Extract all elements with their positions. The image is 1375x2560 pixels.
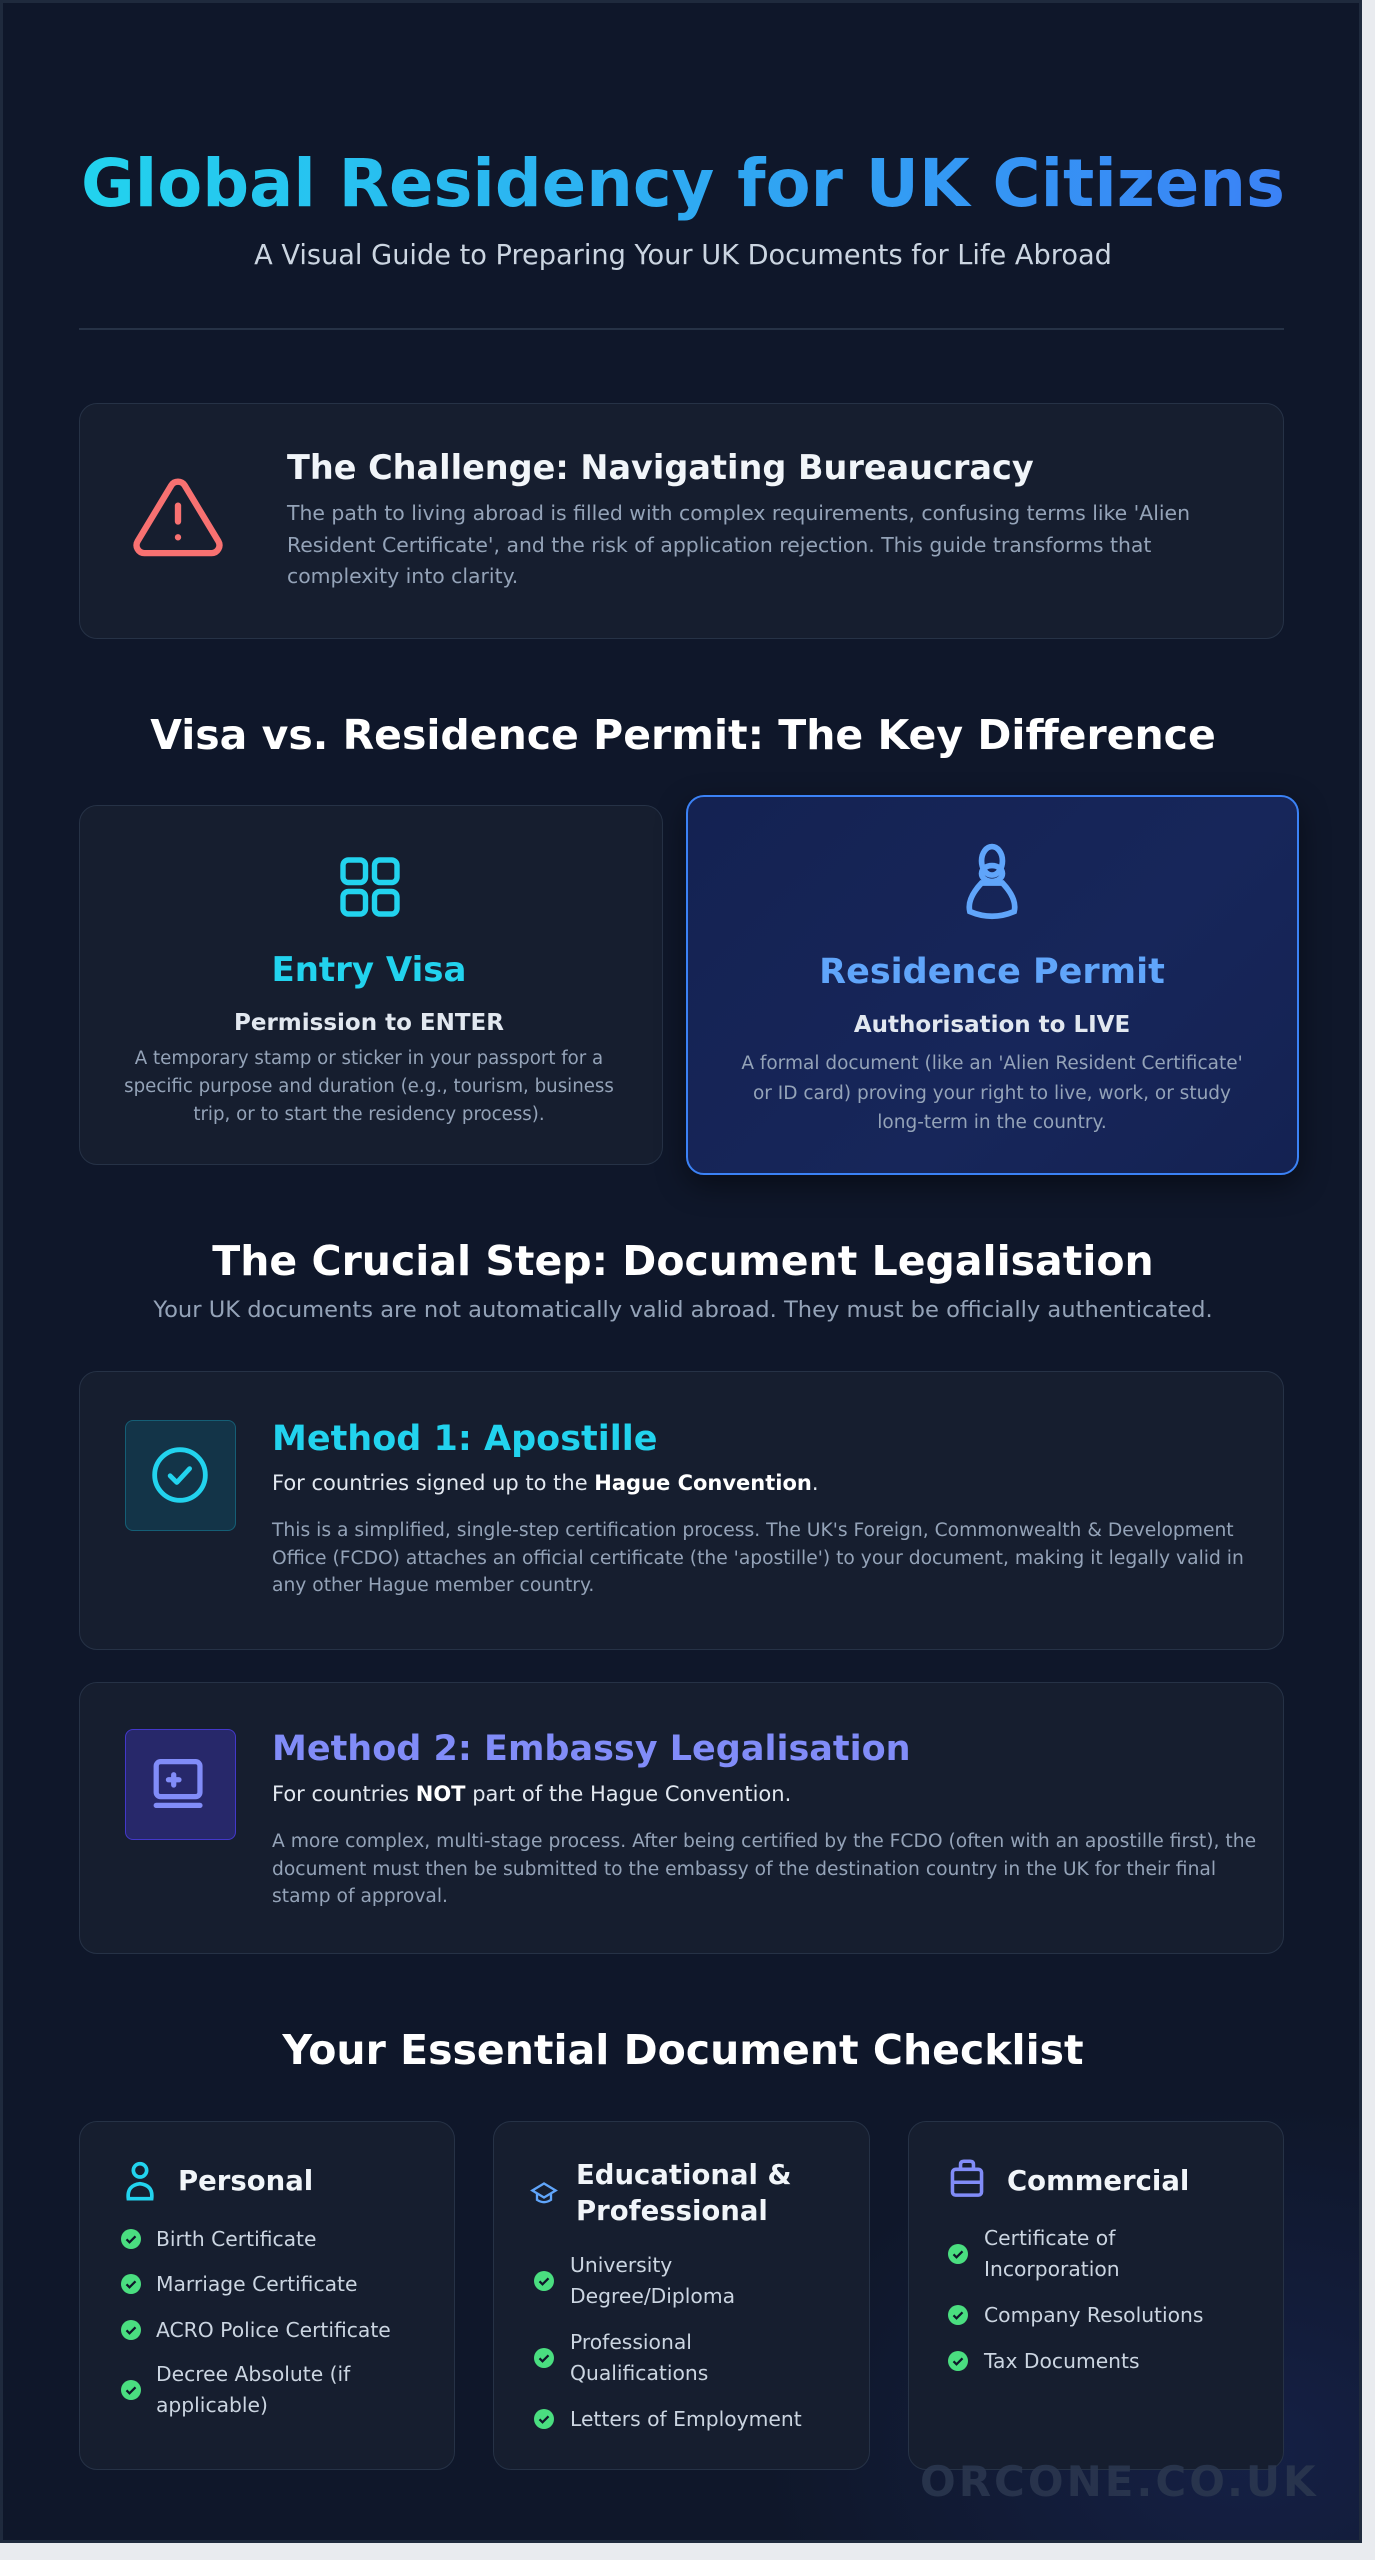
- list: educational: Professional: [570, 2330, 692, 2354]
- panel: method 1: [79, 1371, 1284, 1650]
- heading: method 1: Method 1: Apostille: [272, 1419, 658, 1459]
- list: commercial: Incorporation: [984, 2257, 1120, 2281]
- list: personal: ACRO Police Certificate: [156, 2318, 391, 2342]
- text: method 2 body: stamp of approval.: [272, 1886, 448, 1907]
- heading: residence permit: Residence Permit: [819, 952, 1165, 992]
- list: personal: Birth Certificate: [156, 2227, 316, 2251]
- list: personal: Marriage Certificate: [156, 2272, 357, 2296]
- subheading: Permission to ENTER: [234, 1010, 504, 1036]
- text: method 1 lead: For countries signed up to the Hague Convention.: [272, 1471, 819, 1495]
- text: residence body: long-term in the country.: [877, 1112, 1107, 1133]
- list: commercial: [948, 2226, 1203, 2373]
- icon: embassy: [125, 1729, 236, 1840]
- panel: entry visa: [79, 805, 663, 1165]
- text: entry visa body: trip, or to start the residency process).: [193, 1104, 545, 1125]
- list: educational: University: [570, 2253, 672, 2277]
- heading: entry visa: Entry Visa: [271, 950, 466, 990]
- text: entry visa body: A temporary stamp or sticker in your passport for a: [135, 1048, 603, 1069]
- text: legalisation subtitle: Your UK documents are not automatically valid abroad. They must be officially authenticated.: [153, 1297, 1213, 1323]
- text: challenge body: Resident Certificate', and the risk of application rejection. This guide transforms that: [287, 532, 1151, 556]
- text: entry visa body: [124, 1048, 614, 1125]
- text: method 1 body: Office (FCDO) attaches an official certificate (the 'apostille') to your document, making it legally valid in: [272, 1548, 1244, 1568]
- text: method 1 body: [272, 1520, 1244, 1596]
- text: method 1 body: any other Hague member country.: [272, 1575, 594, 1596]
- panel: residence permit: [686, 795, 1299, 1175]
- list: commercial: Certificate of: [984, 2226, 1115, 2250]
- icon: briefcase: [950, 2160, 984, 2197]
- heading: educational: Professional: [576, 2195, 768, 2227]
- text: method 2 lead: For countries NOT part of the Hague Convention.: [272, 1782, 791, 1806]
- list: educational: Qualifications: [570, 2361, 708, 2385]
- panel: method 2: [79, 1682, 1284, 1954]
- subheading: Authorisation to LIVE: [854, 1012, 1130, 1038]
- list: personal: [121, 2227, 391, 2417]
- text: residence body: [741, 1053, 1243, 1133]
- watermark: ORCONE.CO.UK: [920, 2457, 1319, 2506]
- list: commercial: Company Resolutions: [984, 2303, 1203, 2327]
- list: personal: Decree Absolute (if: [156, 2362, 350, 2386]
- icon: graduation: [530, 2182, 558, 2204]
- list: educational: [534, 2253, 802, 2431]
- text: method 2 body: document must then be submitted to the embassy of the destination country in the UK for their final: [272, 1858, 1216, 1880]
- text: method 2 body: [272, 1831, 1256, 1907]
- heading: personal: Personal: [178, 2165, 313, 2197]
- text: challenge body: complexity into clarity.: [287, 564, 518, 588]
- panel: commercial: [908, 2121, 1284, 2470]
- list: educational: Degree/Diploma: [570, 2284, 735, 2308]
- heading: method 2: Method 2: Embassy Legalisation: [272, 1729, 911, 1769]
- text: residence body: or ID card) proving your right to live, work, or study: [753, 1082, 1231, 1104]
- heading: challenge: The Challenge: Navigating Bureaucracy: [287, 448, 1034, 487]
- heading: educational: [576, 2159, 792, 2227]
- heading: visa vs permit: Visa vs. Residence Permit: The Key Difference: [150, 711, 1216, 759]
- panel: educational: [493, 2121, 870, 2470]
- text: residence body: A formal document (like an 'Alien Resident Certificate': [741, 1053, 1243, 1074]
- icon: warning: [133, 478, 223, 556]
- icon: person: [966, 844, 1018, 920]
- heading: checklist: Your Essential Document Checklist: [282, 2026, 1084, 2074]
- text: challenge body: The path to living abroad is filled with complex requirements, confusing terms like 'Alien: [287, 501, 1190, 525]
- text: challenge body: [286, 501, 1190, 588]
- subtitle: A Visual Guide to Preparing Your UK Documents for Life Abroad: [254, 240, 1112, 271]
- heading: legalisation: The Crucial Step: Document Legalisation: [212, 1237, 1154, 1285]
- title: Global Residency for UK Citizens: [81, 146, 1285, 222]
- icon: grid: [340, 857, 400, 917]
- text: method 1 body: This is a simplified, single-step certification process. The UK's Foreign, Commonwealth & Development: [272, 1520, 1234, 1541]
- text: entry visa body: specific purpose and duration (e.g., tourism, business: [124, 1076, 614, 1097]
- panel: challenge: [79, 403, 1284, 639]
- list: personal: applicable): [156, 2393, 268, 2417]
- heading: commercial: Commercial: [1007, 2165, 1189, 2197]
- list: educational: Letters of Employment: [570, 2407, 802, 2431]
- heading: educational: Educational &: [576, 2159, 792, 2191]
- icon: check circle: [125, 1420, 236, 1531]
- text: method 2 body: A more complex, multi-stage process. After being certified by the FCDO (often with an apostille first), the: [272, 1831, 1256, 1852]
- list: commercial: Tax Documents: [984, 2349, 1140, 2373]
- icon: person: [126, 2162, 154, 2200]
- panel: personal: [79, 2121, 455, 2470]
